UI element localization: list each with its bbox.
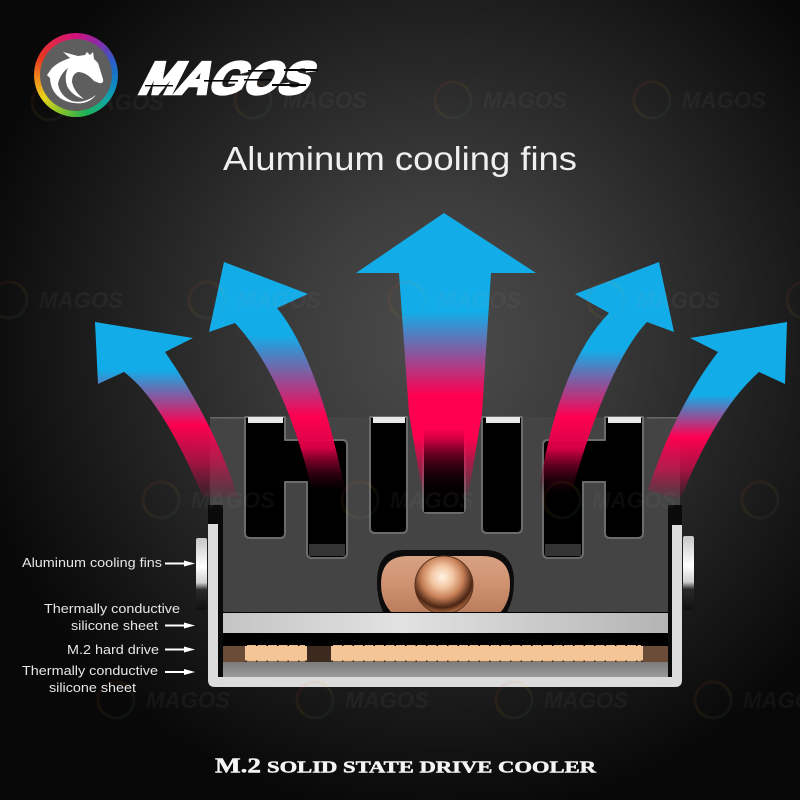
watermarks: MAGOS [237, 287, 322, 313]
watermarks: MAGOS [636, 287, 721, 313]
center slot shadow [424, 428, 464, 512]
arrow: inner right [538, 262, 674, 497]
metal bracket [208, 524, 682, 687]
watermarks: MAGOS [390, 487, 475, 513]
watermarks: MAGOS [39, 287, 124, 313]
watermarks: MAGOS [345, 687, 430, 713]
brand logo badge [34, 33, 118, 117]
callout: m.2 hard drive: M.2 hard drive [67, 643, 159, 657]
copper heat pipe [377, 550, 514, 614]
product caption: SOLID STATE DRIVE COOLER [267, 758, 597, 776]
callout: m.2 hard drive [67, 643, 195, 657]
watermarks: MAGOS [437, 287, 522, 313]
callout: upper silicone sheet: silicone sheet [71, 619, 159, 633]
watermarks: MAGOS [544, 687, 629, 713]
watermarks: MAGOS [682, 87, 767, 113]
callout: lower silicone sheet: silicone sheet [49, 681, 137, 695]
heatsink assembly [196, 417, 694, 687]
callout: aluminum cooling fins: Aluminum cooling fins [22, 556, 162, 570]
side clips [196, 536, 694, 610]
callout: lower silicone sheet: Thermally conductive [22, 664, 158, 678]
heatsink fin slots [245, 417, 643, 558]
icon: horse head [47, 52, 104, 104]
airflow arrows [95, 213, 787, 512]
brand wordmark: MAGOS [132, 54, 325, 104]
arrow: far right [648, 322, 787, 500]
upper thermal sheet [223, 613, 668, 633]
wordmark speed cuts [145, 69, 318, 86]
callout: upper silicone sheet [44, 602, 195, 633]
arrow: inner left [209, 262, 345, 490]
callout: upper silicone sheet: Thermally conductive [44, 602, 180, 616]
fin slot floors and highlights [210, 417, 680, 556]
lower thermal sheet [223, 662, 668, 677]
watermarks: MAGOS [283, 87, 368, 113]
watermarks: MAGOS [483, 87, 568, 113]
aluminum fin body [210, 417, 680, 614]
arrow: far left [95, 322, 238, 497]
watermarks [0, 82, 800, 718]
title: Aluminum cooling fins [223, 140, 577, 177]
product caption: M.2 [215, 754, 261, 778]
product caption [215, 754, 597, 778]
callout: lower silicone sheet [22, 664, 195, 695]
watermarks: MAGOS [592, 487, 677, 513]
watermarks: MAGOS [80, 89, 165, 115]
watermarks: MAGOS [146, 687, 231, 713]
base plate stack [223, 612, 668, 677]
bracket top caps [208, 505, 682, 677]
watermarks: MAGOS [191, 487, 276, 513]
m.2 drive board [223, 646, 668, 662]
arrow: center [356, 213, 536, 497]
